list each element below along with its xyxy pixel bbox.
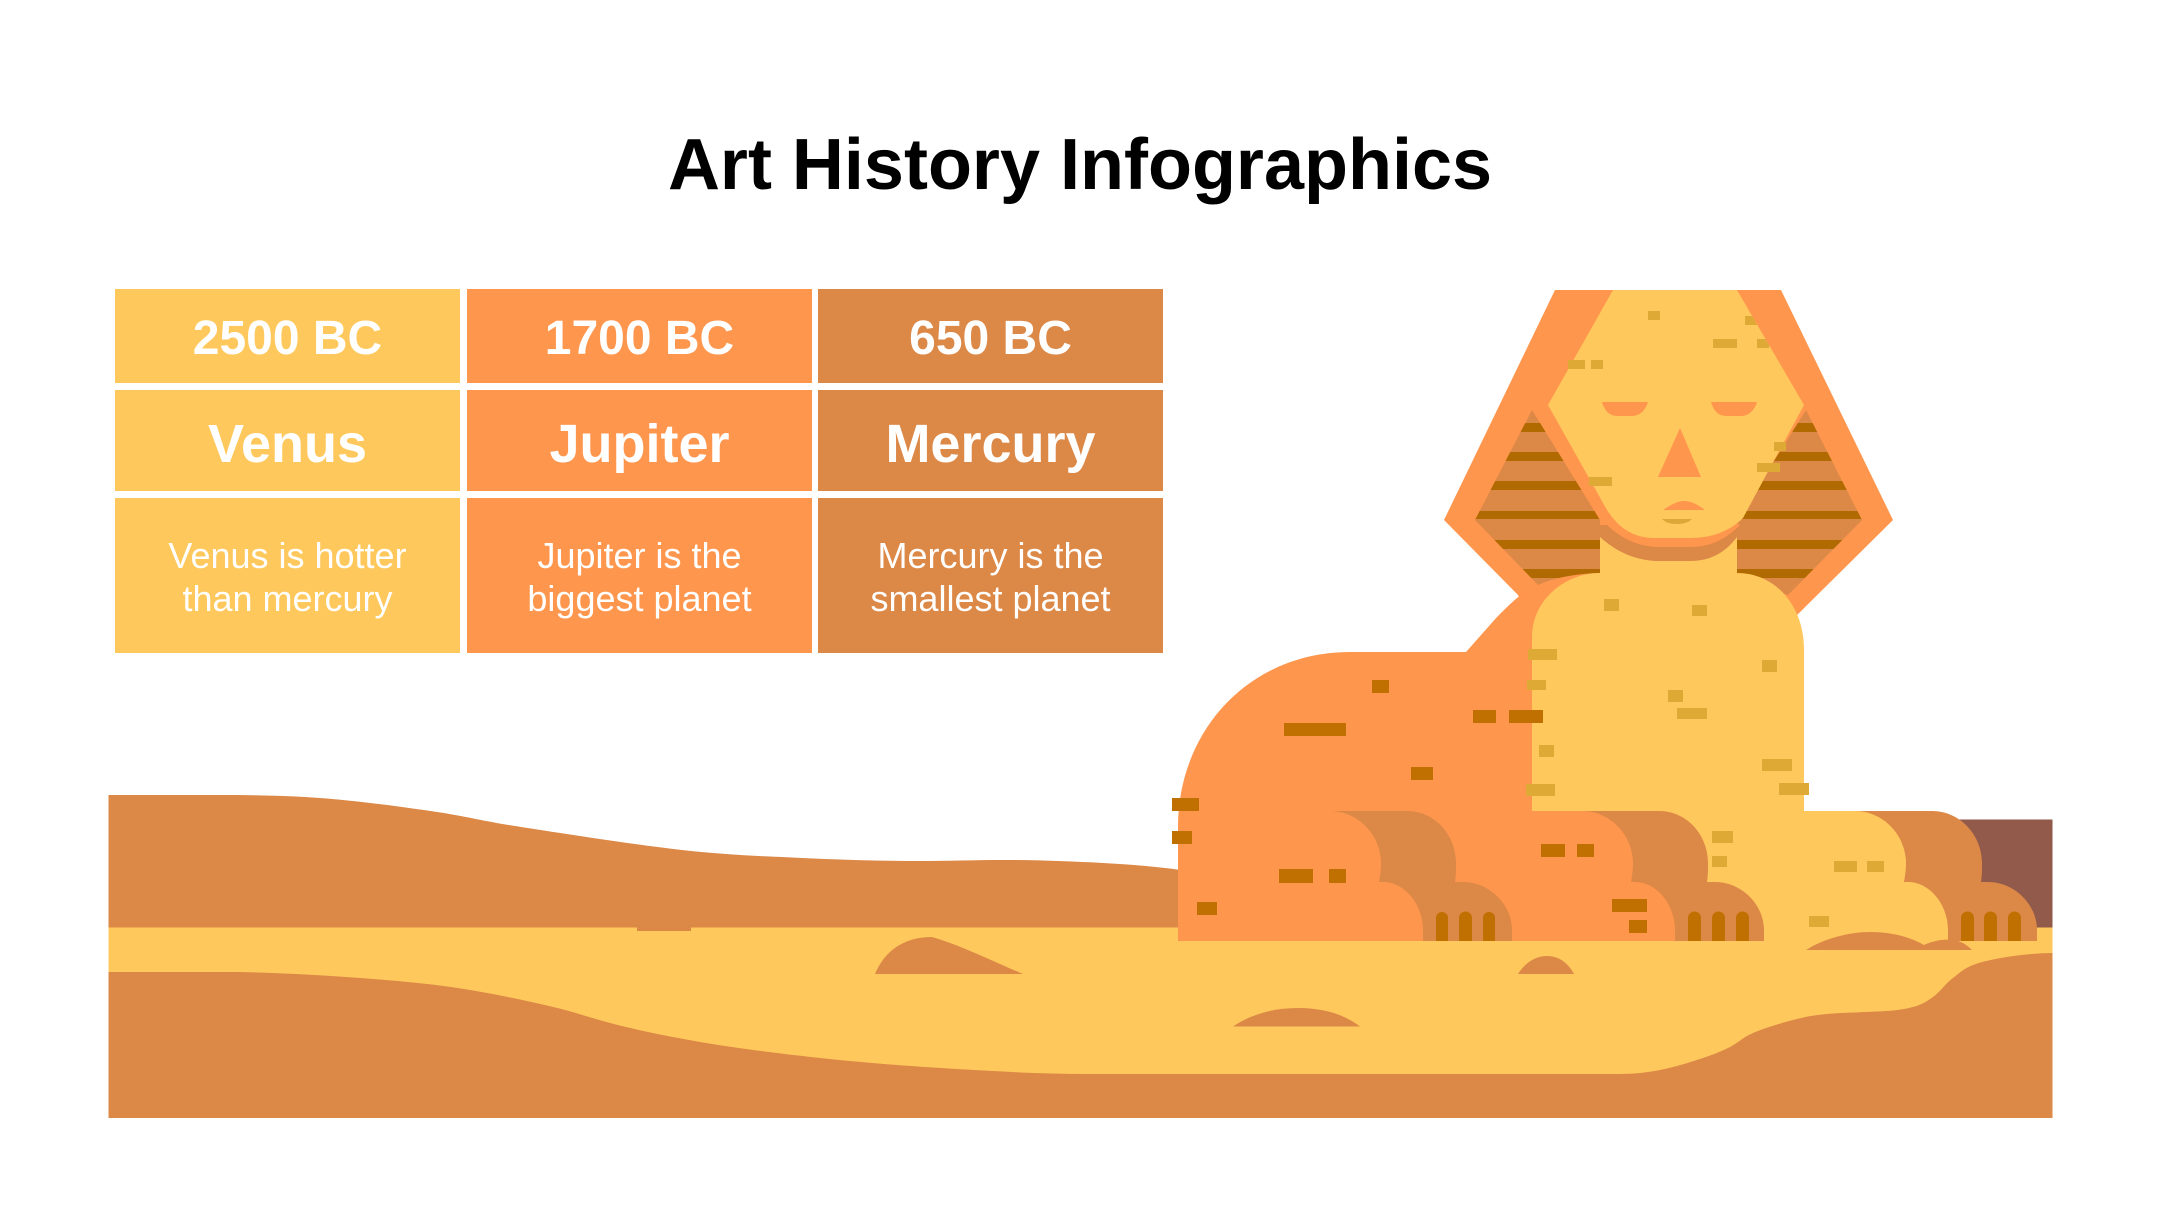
headdress: [1444, 290, 1893, 622]
date: 1700 BC: [467, 289, 812, 383]
headdress stripes right: [1735, 405, 1870, 595]
foreground mounds by right paw: [1806, 932, 1972, 950]
date: 2500 BC: 2500 BC: [193, 312, 382, 364]
title: Art History Infographics: [668, 125, 1492, 205]
description: Mercury: Mercury is the: [877, 534, 1104, 576]
mouth: [1662, 501, 1705, 524]
panel: timeline table: [115, 289, 1163, 653]
paw: right dark: [1855, 811, 2037, 941]
heading: Venus: [115, 390, 460, 491]
front dune: [108, 953, 2052, 1118]
sand mounds: [637, 925, 1574, 1026]
headdress stripes left: [1475, 410, 1600, 585]
heading: Mercury: [818, 390, 1163, 491]
collar: [1532, 400, 1740, 547]
description: Mercury: smallest planet: [870, 578, 1111, 618]
description: Venus: than mercury: [182, 578, 393, 618]
collar shadow: [1600, 525, 1737, 561]
heading: Mercury: Mercury: [885, 414, 1096, 474]
sand marks on tan stone: [1526, 360, 1884, 927]
description: Venus: Venus is hotter: [168, 534, 407, 576]
paw: middle dark: [1582, 811, 1764, 941]
date: 650 BC: [818, 289, 1163, 383]
paw: middle toes: [1688, 912, 1749, 941]
chest: [1532, 573, 1804, 941]
paw: left toes: [1436, 912, 1495, 941]
paw: right toes: [1961, 912, 2021, 941]
face weathering marks: [1648, 311, 1769, 348]
heading: Venus: Venus: [208, 414, 367, 474]
description: Jupiter: [467, 498, 812, 653]
date: 2500 BC: [115, 289, 460, 383]
paw: left dark: [1330, 811, 1512, 941]
paw: right front: [1804, 811, 1948, 941]
description: Mercury: [818, 498, 1163, 653]
heading: Jupiter: Jupiter: [549, 414, 730, 474]
date: 650 BC: 650 BC: [909, 312, 1072, 364]
nose: [1658, 428, 1701, 477]
brick marks on orange body: [1172, 680, 1647, 933]
back rock: [1950, 820, 2052, 928]
sand ground: [108, 928, 2052, 1118]
illustration: desert and sphinx: [108, 290, 2052, 1118]
face: [1548, 290, 1804, 538]
description: Jupiter: Jupiter is the: [537, 534, 742, 576]
paw: middle front: [1512, 811, 1675, 941]
sphinx: [1172, 290, 2037, 941]
description: Jupiter: biggest planet: [527, 578, 752, 618]
eyes: [1602, 402, 1757, 416]
paw: left front: [1250, 811, 1423, 941]
description: Venus: [115, 498, 460, 653]
heading: Jupiter: [467, 390, 812, 491]
lion body: [1178, 573, 1640, 941]
neck: [1600, 525, 1737, 577]
date: 1700 BC: 1700 BC: [545, 312, 734, 364]
back dune: [108, 795, 1180, 928]
